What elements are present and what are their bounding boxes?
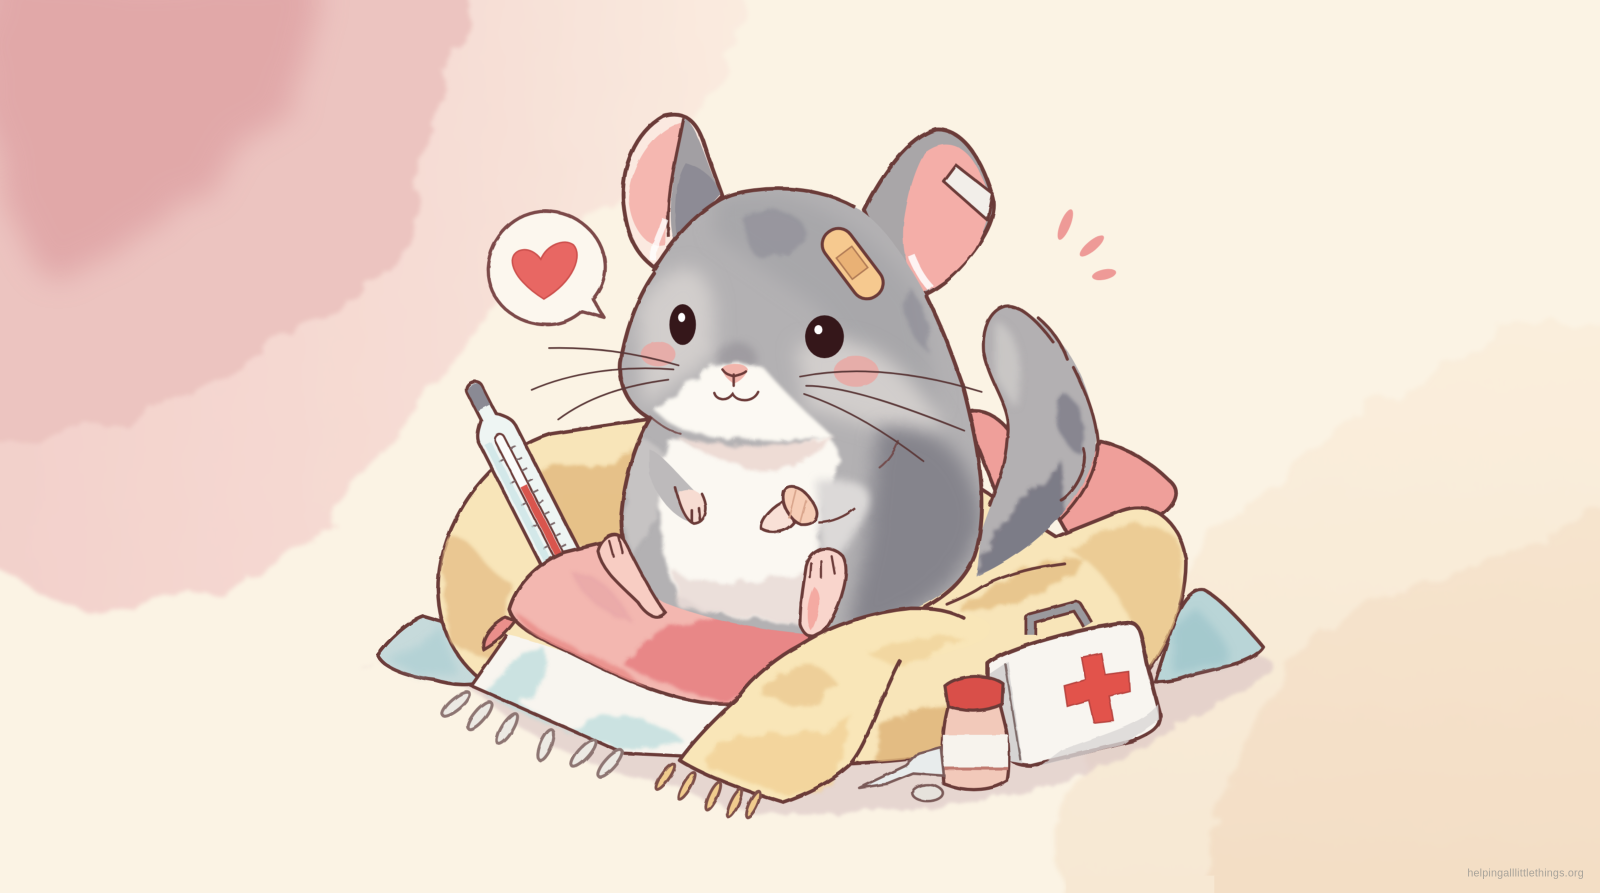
left foot — [598, 535, 665, 617]
speech bubble with heart — [488, 211, 605, 325]
chinchilla scene artwork — [378, 115, 1263, 819]
thermometer — [453, 373, 585, 581]
heart — [512, 242, 577, 299]
bottle label — [943, 735, 1008, 768]
whiskers — [532, 348, 982, 461]
medicine bottle — [942, 676, 1009, 790]
head bandage — [816, 222, 889, 305]
left blue pillow — [378, 616, 490, 685]
right eye — [805, 315, 844, 358]
chinchilla head and body — [620, 189, 982, 635]
kit case — [988, 623, 1160, 765]
pill — [912, 785, 943, 801]
left arm — [649, 449, 706, 524]
white muzzle and chin — [655, 365, 835, 469]
scarf outline — [680, 608, 964, 802]
fringe — [653, 762, 763, 819]
white and blue blanket with fringe — [439, 635, 736, 780]
ground shadow — [359, 653, 1273, 814]
face details — [532, 222, 982, 461]
pink cushion under chinchilla — [483, 531, 816, 704]
ointment tube and pill — [859, 747, 944, 801]
pink blanket behind chinchilla — [964, 411, 1176, 541]
cushion fold line — [947, 563, 1064, 604]
tail fur strokes — [983, 306, 1098, 518]
mercury — [493, 433, 572, 574]
bandaged right arm — [761, 487, 855, 532]
background: pink watercolor wash, top left — [0, 0, 740, 617]
sparkle marks — [1054, 207, 1117, 282]
chinchilla right ear — [864, 129, 994, 294]
watermark text: helpingalllittlethings.org — [1467, 868, 1584, 880]
chinchilla left ear — [623, 115, 722, 267]
bottle cap — [945, 676, 1003, 711]
kit red cross — [1064, 653, 1130, 723]
right blue pillow — [1155, 590, 1263, 682]
background: tan watercolor wash, bottom right — [1056, 316, 1600, 893]
yellow cushion — [438, 418, 1186, 765]
nose — [722, 364, 748, 384]
fringe loops — [439, 689, 626, 780]
mouth — [714, 369, 758, 400]
right foot — [800, 549, 846, 637]
left eye — [669, 304, 696, 345]
bandage on right ear — [944, 165, 993, 220]
left blush — [641, 342, 676, 366]
tail — [974, 306, 1098, 577]
first aid kit — [988, 606, 1160, 765]
kit handle — [1031, 606, 1088, 635]
yellow scarf with fringe — [653, 608, 990, 819]
right blush — [834, 356, 879, 387]
white belly — [659, 434, 869, 628]
